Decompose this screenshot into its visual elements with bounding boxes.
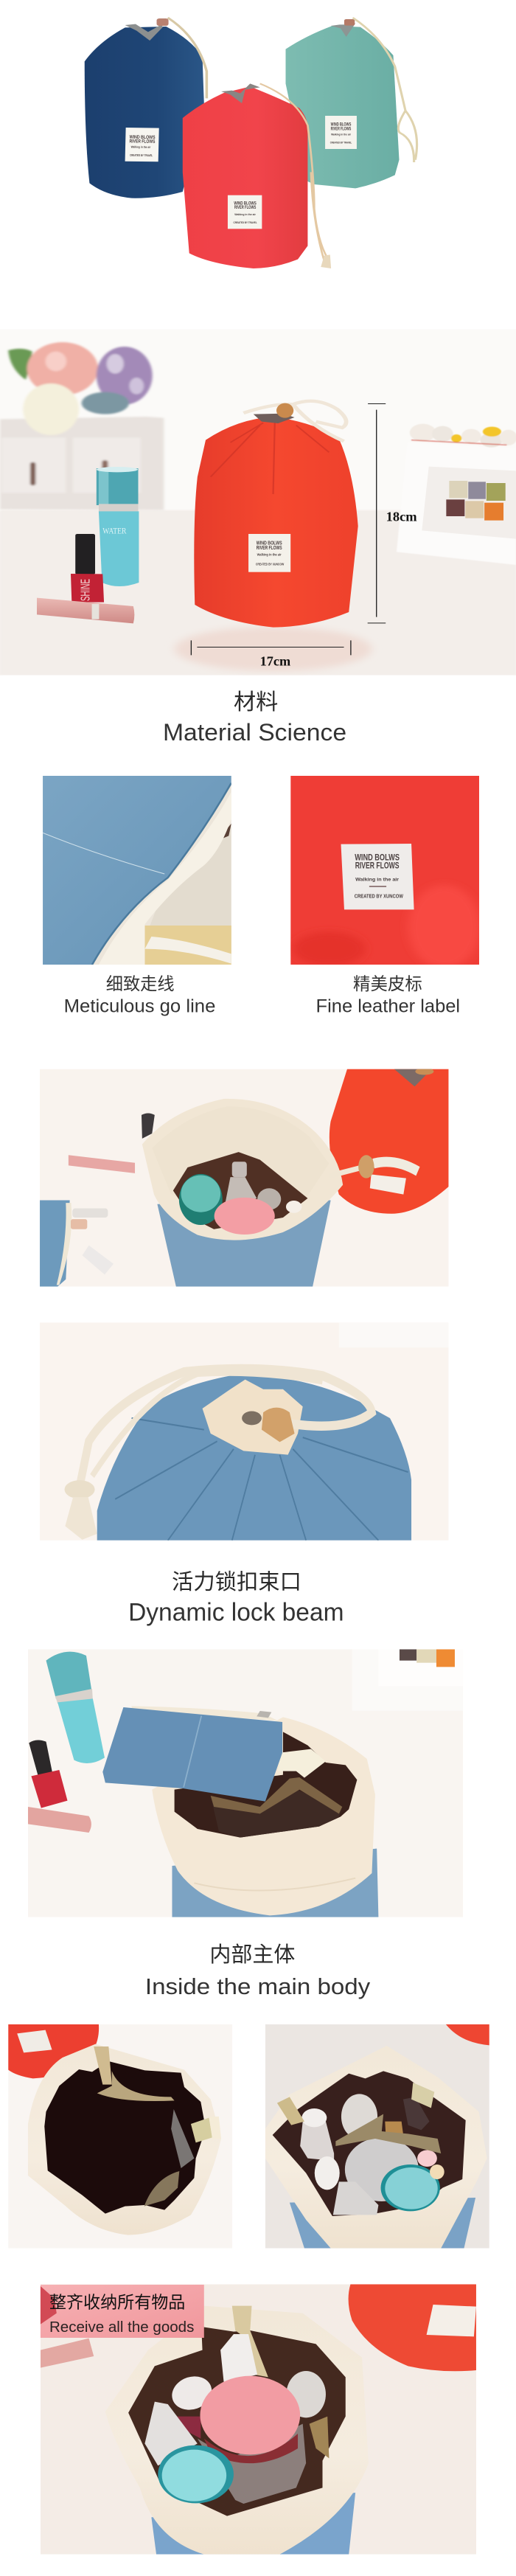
- lipstick cap: [142, 1114, 155, 1139]
- lipstick: [28, 1807, 91, 1833]
- caption en: Receive all the goods: [49, 2319, 194, 2336]
- caption en: stitching: Meticulous go line: [64, 996, 215, 1017]
- strap and mesh: [94, 2046, 221, 2207]
- navy bag: Walking in the air: [131, 145, 151, 150]
- photo background: [0, 509, 516, 676]
- orange bag: Walking in the air: [257, 553, 282, 557]
- leather label: RIVER FLOWS: [355, 861, 400, 871]
- coral bag: CREATED BY TRAVEL: [234, 221, 257, 225]
- panel: stitching photo: [43, 776, 234, 966]
- flowers: [8, 342, 153, 435]
- teal bag: WIND BLOWS: [331, 122, 351, 127]
- width dimension: [191, 640, 351, 669]
- section: inside the main body: [28, 1649, 463, 1999]
- cord and toggle: [329, 1155, 418, 1178]
- label: 17cm: 17cm: [260, 654, 290, 669]
- label: 18cm: 18cm: [386, 510, 417, 524]
- height dimension: [368, 403, 417, 623]
- bag cream body: [152, 1717, 378, 1917]
- leather label: CREATED BY XUNCOW: [355, 893, 403, 899]
- coral bag: Walking in the air: [234, 213, 256, 217]
- section: materials: [43, 690, 481, 1017]
- teal bottle: [46, 1652, 105, 1763]
- pink caption box: [41, 2285, 204, 2338]
- blue bottom: [151, 2493, 355, 2555]
- lipstick: [69, 1155, 135, 1173]
- cream rim: [265, 2046, 487, 2249]
- teal bag: [286, 18, 417, 188]
- heading en: inside: Inside the main body: [145, 1973, 371, 1999]
- heading zh: dynamic lock beam: 活力锁扣束口: [172, 1569, 301, 1594]
- panel: filled interior: [265, 2024, 489, 2249]
- panel: pouch photo: [28, 1649, 463, 1917]
- orange bag: [194, 401, 358, 628]
- caption zh: stitching: 细致走线: [106, 974, 175, 993]
- orange bag: CREATED BY XUNCOW: [256, 563, 285, 566]
- nail polish: [29, 1740, 68, 1808]
- cream gathered collar: [203, 1380, 303, 1455]
- dark interior: [273, 2071, 466, 2216]
- picture frame: [397, 467, 516, 565]
- blue bag top: [97, 1375, 411, 1541]
- panel: open bag photo: [40, 1068, 448, 1287]
- zipper edge: [99, 791, 231, 965]
- heading zh: materials: 材料: [234, 690, 278, 715]
- leather label: WIND BOLWS: [355, 853, 400, 863]
- section: receive all the goods: [41, 2284, 476, 2555]
- lipstick: [41, 2339, 94, 2368]
- caption zh: label: 精美皮标: [353, 974, 422, 993]
- panel: three colour bags: [85, 18, 417, 268]
- teal bag: RIVER FLOWS: [331, 125, 351, 131]
- zip edge: [132, 1706, 278, 1721]
- blue fabric: [43, 776, 231, 965]
- navy bag: WIND BLOWS: [130, 134, 156, 140]
- navy bag: [85, 18, 206, 198]
- blue pouch: [102, 1707, 282, 1802]
- caption zh: 整齐收纳所有物品: [49, 2292, 185, 2311]
- cosmetics: [277, 2083, 444, 2215]
- red bag behind: [330, 1068, 448, 1214]
- pockets and items: [144, 2306, 329, 2504]
- red bag corner: [349, 2284, 476, 2371]
- blue bag bottom: [290, 2198, 475, 2249]
- red corner: [446, 2024, 489, 2045]
- panel: drawn-up bag photo: [40, 1322, 448, 1541]
- panel: empty interior: [8, 2024, 232, 2249]
- navy bag: RIVER FLOWS: [129, 139, 155, 145]
- orange bag: RIVER FLOWS: [257, 544, 282, 551]
- teal bottle: WATER: [102, 526, 127, 536]
- mesh pocket: [211, 1787, 342, 1838]
- heading en: dynamic lock beam: Dynamic lock beam: [128, 1597, 344, 1626]
- coral bag: RIVER FLOWS: [234, 204, 256, 210]
- lining: [144, 824, 234, 966]
- nail polish: [71, 534, 104, 603]
- leather label: Walking in the air: [355, 878, 399, 882]
- dark interior: [175, 1732, 357, 1838]
- red bag corner: [8, 2024, 99, 2078]
- cosmetics: [179, 1162, 301, 1235]
- toggle: [262, 1408, 295, 1442]
- dark interior: [44, 2061, 206, 2214]
- toys on frame: [410, 424, 516, 448]
- dark interior: [128, 2327, 346, 2516]
- leather label: [341, 844, 414, 909]
- section: dynamic lock beam: [40, 1068, 448, 1626]
- teal bag: Walking in the air: [331, 133, 351, 136]
- nail polish: SHINE: [79, 579, 93, 601]
- interior: [173, 1152, 307, 1229]
- coral bag: WIND BLOWS: [234, 200, 257, 206]
- navy bag: CREATED BY TRAVEL: [130, 153, 153, 158]
- cream lining: [142, 1099, 343, 1240]
- heading en: Material Science: Material Science: [163, 719, 346, 746]
- orange bag: WIND BOLWS: [257, 540, 282, 546]
- heading zh: inside: 内部主体: [209, 1943, 295, 1967]
- rope: [65, 1369, 372, 1540]
- dresser: [0, 417, 164, 510]
- background frame: [379, 1649, 463, 1686]
- cream rim: [105, 2306, 369, 2555]
- caption en: label: Fine leather label: [316, 996, 460, 1017]
- cream rim: [28, 2044, 221, 2235]
- coral bag: [183, 83, 331, 268]
- strap: [278, 1749, 326, 1778]
- panel: label photo: [290, 776, 481, 968]
- fabric folds: [115, 1418, 408, 1541]
- small pouch: [40, 1200, 114, 1287]
- teal bag: CREATED BY TRAVEL: [330, 141, 352, 145]
- lipstick: [37, 598, 134, 623]
- section: two interior photos: [8, 2024, 489, 2249]
- blue bag body: [157, 1200, 331, 1287]
- panel: full bag photo: [41, 2284, 476, 2555]
- teal bottle: [97, 467, 139, 586]
- panel: size photo: [0, 330, 516, 676]
